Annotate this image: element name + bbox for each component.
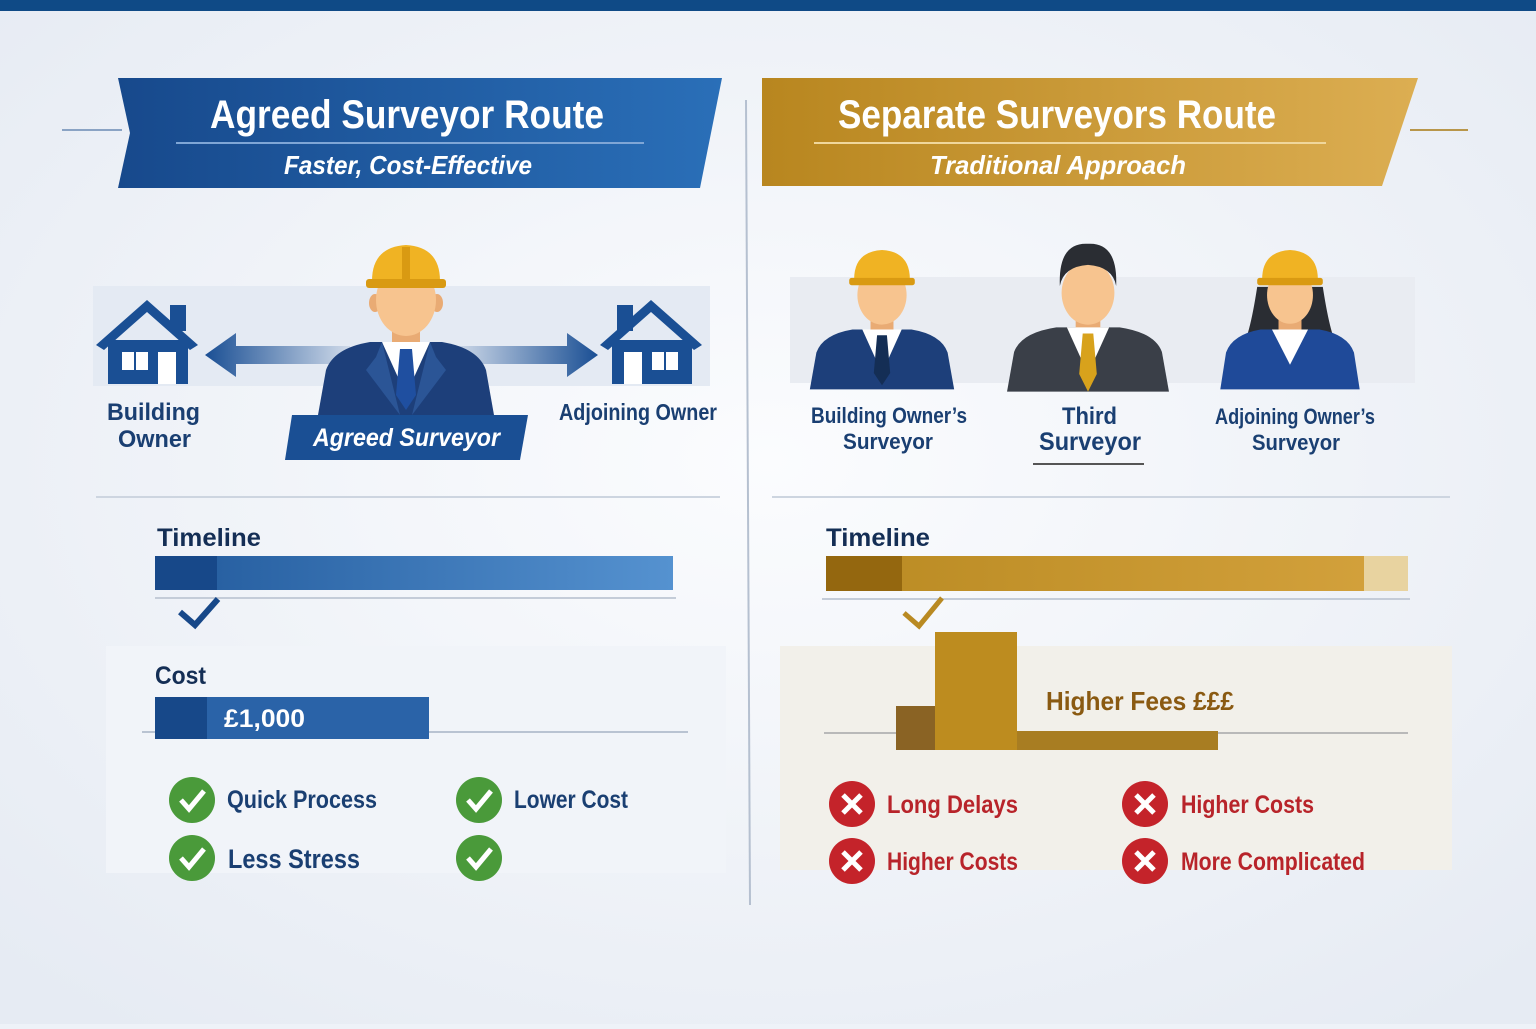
arrow right — [455, 333, 598, 377]
panel: agreed surveyor diagram — [93, 245, 717, 460]
labels: surveyors: Adjoining Owner’s — [1215, 404, 1375, 429]
panel: separate cost: Higher Fees £££ — [1046, 686, 1235, 716]
icon: check gold — [904, 598, 942, 626]
labels: surveyors: Surveyor — [843, 429, 933, 454]
label: building owner: Building — [107, 399, 200, 426]
timeline: agreed: Timeline — [157, 524, 261, 552]
label: agreed surveyor: Agreed Surveyor — [312, 424, 501, 452]
timeline: separate: Timeline — [826, 524, 930, 552]
timeline: separate — [822, 524, 1410, 626]
subtitle left: Faster, Cost-Effective — [284, 150, 532, 180]
panel: agreed cost: Cost — [155, 662, 207, 690]
label: building owner: Owner — [118, 426, 191, 453]
person: building owner's surveyor — [810, 250, 954, 389]
banner: separate surveyors route — [762, 78, 1418, 186]
labels: surveyors: Building Owner’s — [811, 403, 967, 428]
drawbacks list: Long Delays — [887, 791, 1018, 819]
benefits list: Less Stress — [228, 844, 360, 874]
labels: surveyors: Surveyor — [1252, 430, 1340, 455]
labels: surveyors: Surveyor — [1039, 428, 1141, 456]
panel: separate surveyors diagram — [790, 244, 1415, 464]
arrow left — [205, 333, 350, 377]
panel: separate cost — [780, 632, 1452, 884]
title left: Agreed Surveyor Route — [210, 93, 604, 137]
bar chart: fees — [896, 632, 1218, 750]
person: third surveyor — [1007, 244, 1169, 392]
label: adjoining owner: Adjoining Owner — [559, 399, 717, 425]
panel: agreed cost — [106, 646, 726, 881]
benefits list: Quick Process — [227, 786, 377, 814]
person: agreed surveyor — [318, 245, 494, 415]
title right: Separate Surveyors Route — [838, 93, 1276, 137]
icon: adjoining owner house — [600, 300, 702, 384]
drawbacks list: More Complicated — [1181, 848, 1365, 876]
benefits list — [169, 777, 629, 881]
label: agreed surveyor — [285, 415, 528, 460]
icon: check timeline — [180, 599, 218, 625]
drawbacks list — [829, 781, 1365, 884]
person: adjoining owner's surveyor — [1220, 250, 1360, 389]
timeline: agreed — [155, 524, 676, 625]
labels: surveyors — [811, 403, 1375, 464]
banner: agreed surveyor route — [118, 78, 722, 188]
top bar — [0, 0, 1536, 11]
panel: agreed cost: £1,000 — [224, 705, 305, 733]
benefits list: Lower Cost — [514, 786, 629, 814]
drawbacks list: Higher Costs — [1181, 791, 1314, 819]
label: building owner — [107, 399, 200, 453]
drawbacks list: Higher Costs — [887, 848, 1018, 876]
labels: surveyors: Third — [1062, 403, 1117, 430]
icon: building owner house — [96, 300, 198, 384]
subtitle right: Traditional Approach — [930, 150, 1186, 180]
